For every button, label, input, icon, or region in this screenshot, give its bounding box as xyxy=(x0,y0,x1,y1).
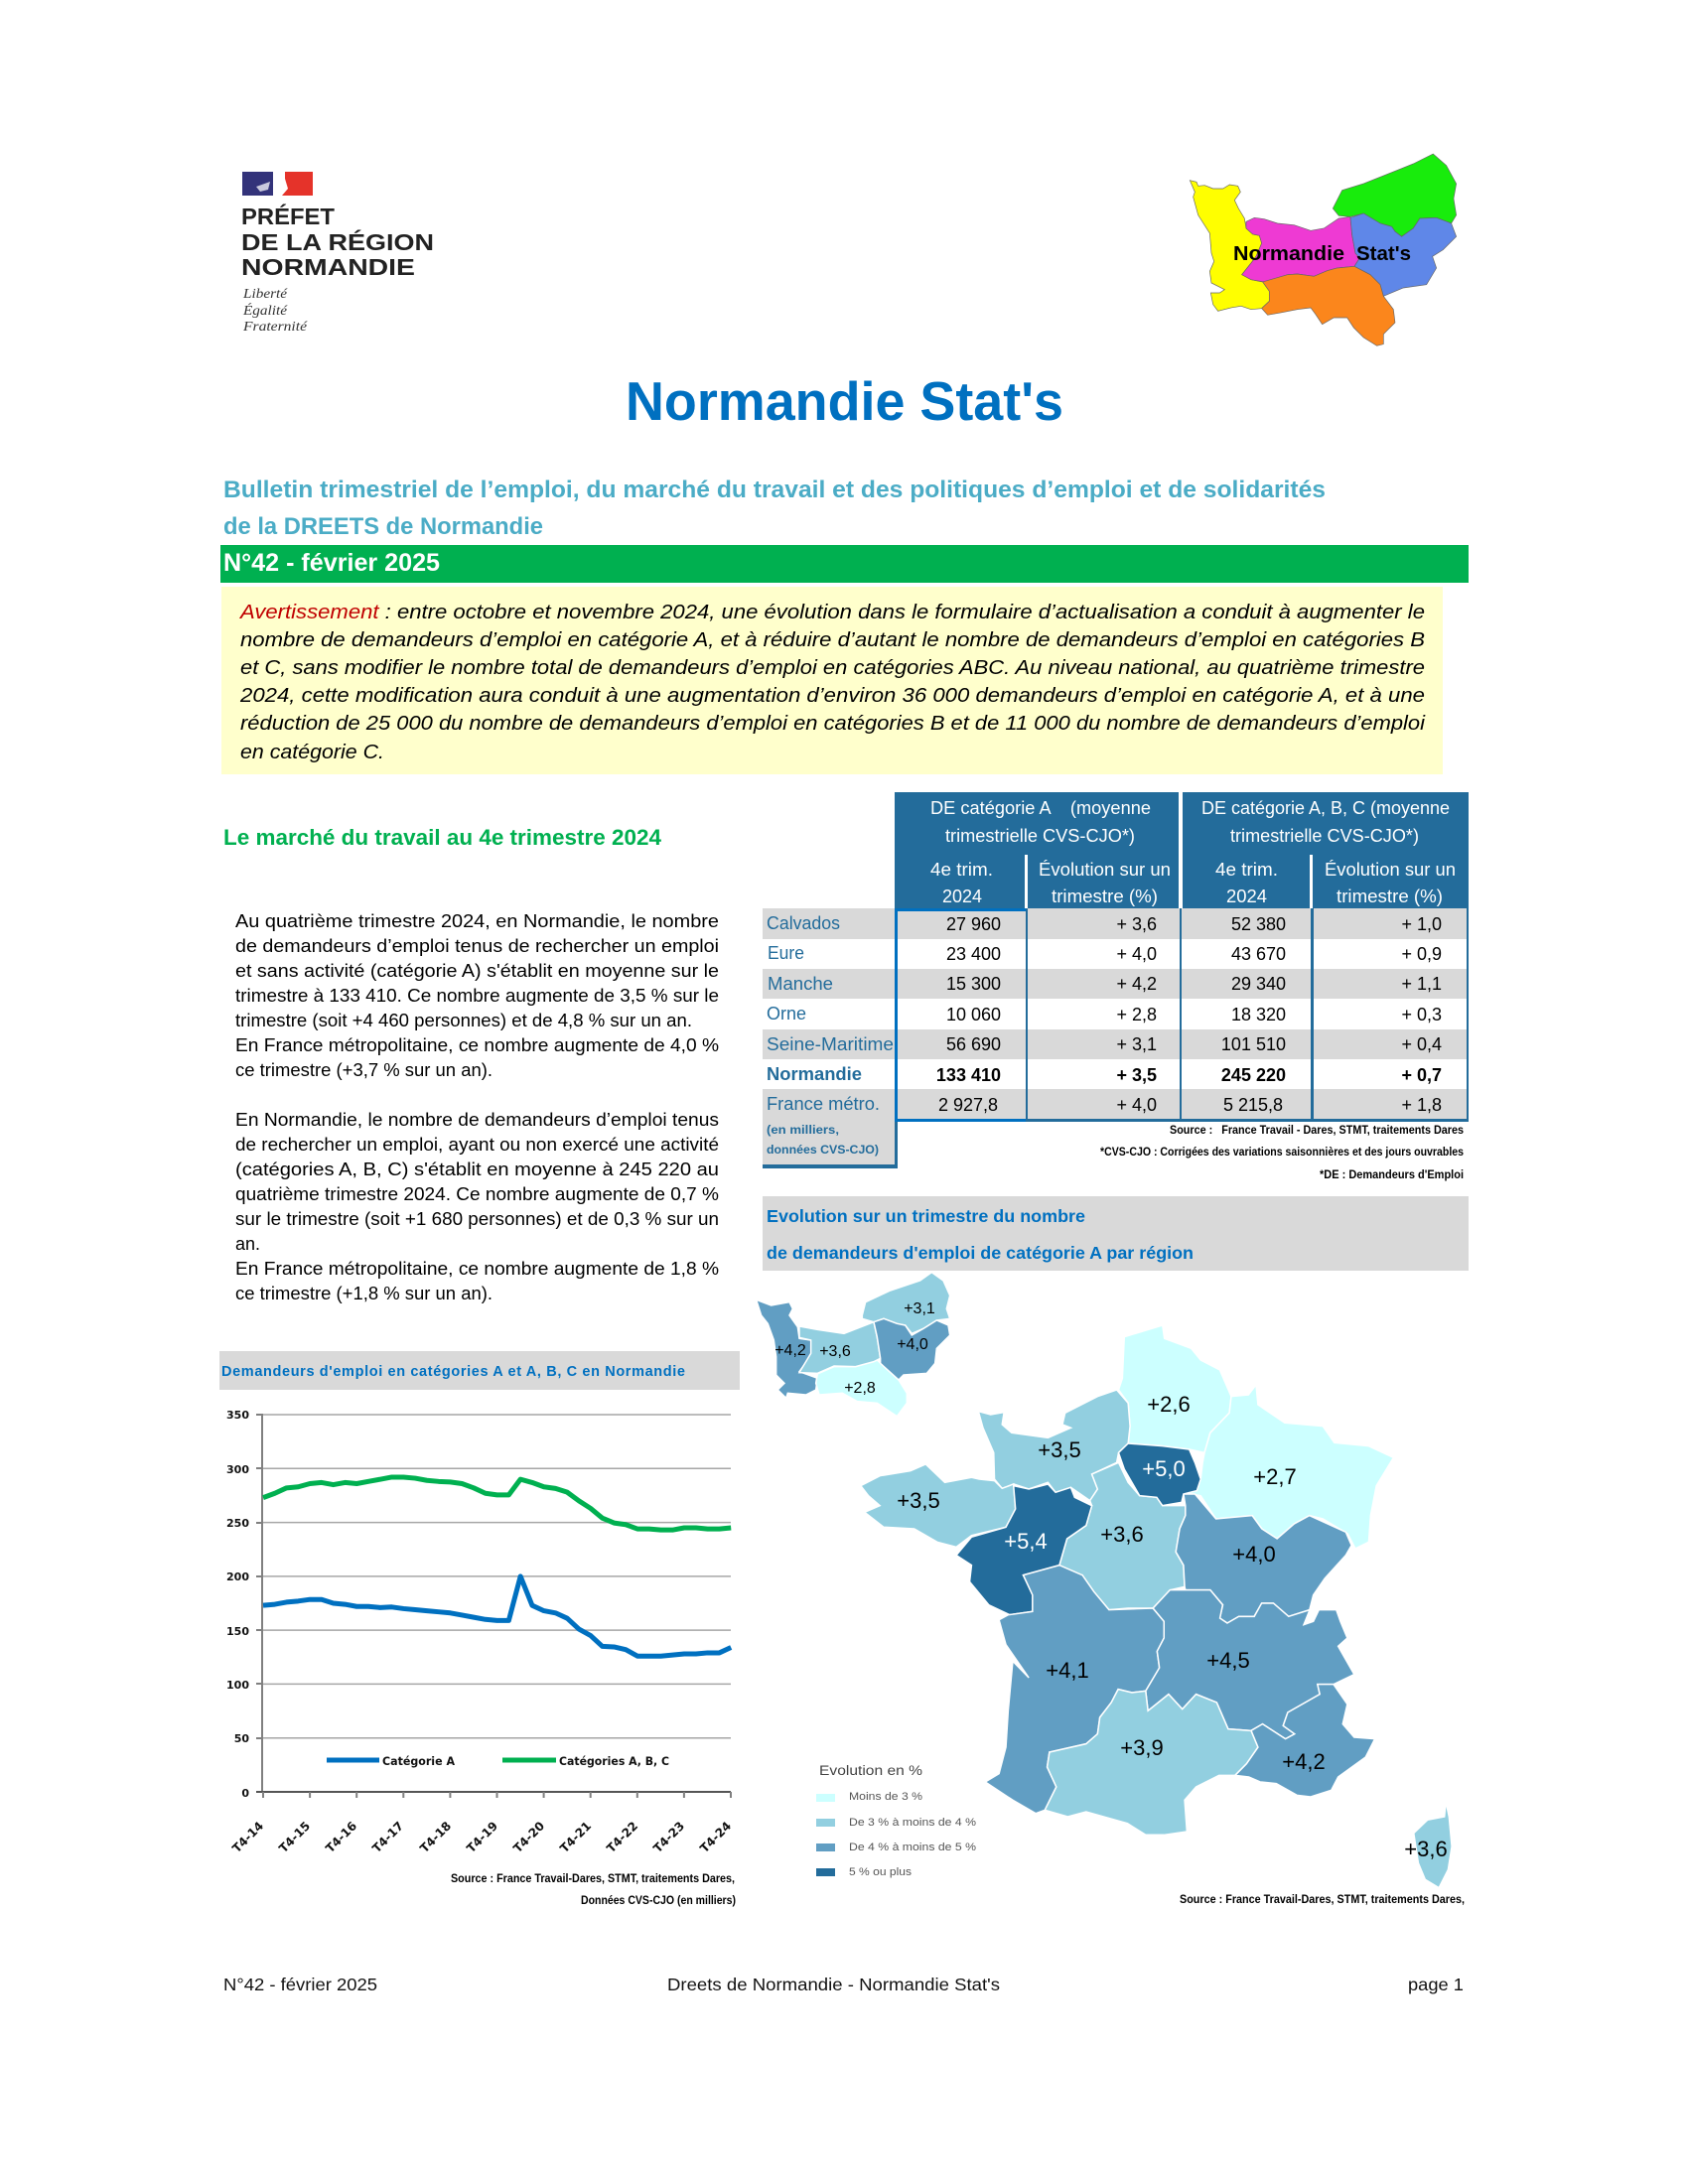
table header: Évolution sur un xyxy=(1325,860,1456,880)
logo map label: Stat's xyxy=(1356,243,1411,265)
series: categories A, B, C xyxy=(263,1477,731,1530)
table row labels: Normandie xyxy=(767,1064,862,1084)
table values: + 0,9 xyxy=(1401,944,1442,964)
map source: Source : France Travail-Dares, STMT, traitements Dares, xyxy=(1180,1894,1465,1906)
inset value labels xyxy=(774,1300,935,1397)
subtitle: de la DREETS de Normandie xyxy=(223,513,543,540)
map value labels: +4,1 xyxy=(1046,1658,1089,1683)
northern regions xyxy=(861,1325,1393,1623)
table values: 245 220 xyxy=(1221,1065,1286,1085)
x axis labels xyxy=(229,1819,734,1855)
table values: + 3,6 xyxy=(1116,914,1157,934)
table values: + 0,3 xyxy=(1401,1005,1442,1024)
section heading: labour market: Le marché du travail au 4e trimestre 2024 xyxy=(223,825,662,850)
map value labels: +4,5 xyxy=(1206,1648,1250,1673)
table header: DE catégorie A (moyenne xyxy=(930,798,1151,818)
table values: 29 340 xyxy=(1231,974,1286,994)
y axis labels: 350 xyxy=(226,1409,249,1422)
footer: N°42 - février 2025 xyxy=(223,1975,377,1994)
x axis labels: T4-20 xyxy=(510,1819,547,1855)
table values: 2 927,8 xyxy=(938,1095,998,1115)
table header: trimestrielle CVS-CJO*) xyxy=(945,826,1135,846)
inset value labels: +4,0 xyxy=(897,1336,928,1353)
map: Normandie inset xyxy=(757,1273,950,1417)
y axis labels: 200 xyxy=(226,1570,249,1583)
panel: warning callout: nombre de demandeurs d’emploi en catégorie A, et à réduire d’autant le nombre de demandeurs d’emploi en catégories B xyxy=(240,629,1425,651)
map value labels: +3,9 xyxy=(1120,1735,1164,1760)
inset value labels: +3,1 xyxy=(904,1300,935,1317)
y axis labels: 100 xyxy=(226,1679,249,1692)
map legend: Evolution en % xyxy=(819,1763,922,1778)
text block: labour market commentary: quatrième trimestre 2024. Ce nombre augmente de 0,7 % xyxy=(235,1183,719,1204)
table header: 4e trim. xyxy=(930,860,993,880)
map value labels: +3,6 xyxy=(1404,1837,1448,1861)
table row labels: données CVS-CJO) xyxy=(767,1143,879,1157)
x axis labels: T4-21 xyxy=(557,1819,594,1855)
x axis labels: T4-17 xyxy=(369,1819,406,1855)
text block: labour market commentary: sur le trimestre (soit +1 680 personnes) et de 0,3 % sur un xyxy=(235,1208,719,1229)
table source notes: Source : France Travail - Dares, STMT, traitements Dares xyxy=(1170,1125,1464,1137)
icon: Marianne flag xyxy=(242,172,313,196)
table header: DE catégorie A, B, C (moyenne xyxy=(1201,798,1450,818)
logo map label: Normandie xyxy=(1233,243,1344,265)
table values: + 3,1 xyxy=(1116,1034,1157,1054)
table values: 43 670 xyxy=(1231,944,1286,964)
table values: + 4,0 xyxy=(1116,1095,1157,1115)
logo text: institution name: PRÉFET xyxy=(241,203,336,229)
map: France regions xyxy=(861,1325,1452,1888)
series: category A xyxy=(263,1576,731,1656)
table source notes: *CVS-CJO : Corrigées des variations saisonnières et des jours ouvrables xyxy=(1100,1147,1464,1159)
table values: 18 320 xyxy=(1231,1005,1286,1024)
text block: labour market commentary xyxy=(235,910,719,1303)
issue banner xyxy=(220,545,1469,583)
panel: warning callout: en catégorie C. xyxy=(240,742,384,763)
map value labels xyxy=(897,1392,1448,1861)
inset value labels: +4,2 xyxy=(774,1342,806,1359)
y axis labels: 150 xyxy=(226,1625,249,1638)
chart heading: Demandeurs d'emploi en catégories A et A, B, C en Normandie xyxy=(221,1364,685,1380)
map value labels: +3,6 xyxy=(1100,1522,1144,1547)
table values: 23 400 xyxy=(946,944,1001,964)
logo text: motto: Fraternité xyxy=(242,320,308,335)
map value labels: +2,7 xyxy=(1253,1464,1297,1489)
panel: warning callout: 2024, cette modification aura conduit à une augmentation d’environ 36 000 demandeurs d’emploi en catégorie A, et à une xyxy=(239,685,1425,707)
chart legend xyxy=(327,1754,669,1768)
map heading xyxy=(763,1196,1469,1271)
map value labels: +4,2 xyxy=(1282,1749,1326,1774)
x axis labels: T4-16 xyxy=(323,1819,359,1855)
table row labels: Manche xyxy=(768,974,833,994)
table values: + 2,8 xyxy=(1116,1005,1157,1024)
table values: 52 380 xyxy=(1231,914,1286,934)
table values: + 4,0 xyxy=(1116,944,1157,964)
map legend: De 4 % à moins de 5 % xyxy=(849,1842,976,1853)
logo: Normandie Stat's coloured map xyxy=(1190,154,1457,345)
map legend: De 3 % à moins de 4 % xyxy=(849,1817,976,1829)
table values: 10 060 xyxy=(946,1005,1001,1024)
table values: + 0,7 xyxy=(1401,1065,1442,1085)
panel: warning callout: Avertissement : entre octobre et novembre 2024, une évolution dans le formulaire d’actualisation a conduit à augmenter le xyxy=(239,602,1425,623)
logo text: institution name: DE LA RÉGION xyxy=(241,228,434,255)
table values: + 4,2 xyxy=(1116,974,1157,994)
table values: 56 690 xyxy=(946,1034,1001,1054)
table header: Évolution sur un xyxy=(1039,860,1171,880)
table header: 2024 xyxy=(942,887,982,906)
table row labels: Calvados xyxy=(767,913,840,933)
text block: labour market commentary: En France métropolitaine, ce nombre augmente de 4,0 % xyxy=(235,1034,719,1055)
map value labels: +3,5 xyxy=(897,1488,940,1513)
x axis labels: T4-24 xyxy=(697,1819,734,1855)
text block: labour market commentary: Au quatrième trimestre 2024, en Normandie, le nombre xyxy=(235,910,719,931)
line chart: job seekers in Normandy xyxy=(226,1409,734,1855)
table row labels: France métro. xyxy=(767,1094,880,1114)
y axis labels: 50 xyxy=(234,1732,249,1745)
x axis labels: T4-15 xyxy=(276,1819,313,1855)
table values: 101 510 xyxy=(1221,1034,1286,1054)
text block: labour market commentary: de demandeurs d’emploi tenus de rechercher un emploi xyxy=(235,935,719,956)
table source notes xyxy=(1100,1125,1464,1181)
issue banner: N°42 - février 2025 xyxy=(223,549,440,577)
logo text: institution name: NORMANDIE xyxy=(241,254,415,280)
southern regions xyxy=(985,1566,1452,1888)
map legend: Moins de 3 % xyxy=(849,1791,922,1803)
text block: labour market commentary: trimestre à 133 410. Ce nombre augmente de 3,5 % sur le xyxy=(235,985,719,1006)
table source notes: *DE : Demandeurs d'Emploi xyxy=(1320,1169,1464,1181)
footer: page 1 xyxy=(1408,1975,1464,1994)
table values: + 1,0 xyxy=(1401,914,1442,934)
table values: 5 215,8 xyxy=(1223,1095,1283,1115)
map value labels: +2,6 xyxy=(1147,1392,1191,1417)
panel: warning callout xyxy=(221,587,1443,774)
logo: Préfet de la région Normandie xyxy=(241,172,434,335)
text block: labour market commentary: En Normandie, le nombre de demandeurs d’emploi tenus xyxy=(235,1109,719,1130)
table row labels: Seine-Maritime xyxy=(767,1034,894,1054)
text block: labour market commentary: (catégories A, B, C) s'établit en moyenne à 245 220 au xyxy=(235,1159,719,1179)
table values xyxy=(936,914,1442,1115)
panel: department table xyxy=(763,792,1469,1181)
logo text: institution name xyxy=(241,203,434,280)
table row labels: Eure xyxy=(768,943,804,963)
map heading: de demandeurs d'emploi de catégorie A par région xyxy=(767,1243,1194,1263)
logo map label xyxy=(1233,243,1411,265)
table header: 2024 xyxy=(1226,887,1267,906)
chart source xyxy=(451,1873,736,1907)
chart source: Source : France Travail-Dares, STMT, traitements Dares, xyxy=(451,1873,735,1885)
text block: labour market commentary: trimestre (soit +4 460 personnes) et de 4,8 % sur un an. xyxy=(235,1010,692,1030)
text block: labour market commentary: de rechercher un emploi, ayant ou non exercé une activité xyxy=(235,1134,719,1155)
table values: + 1,1 xyxy=(1401,974,1442,994)
chart heading xyxy=(219,1351,740,1390)
table values: + 0,4 xyxy=(1401,1034,1442,1054)
table header: trimestre (%) xyxy=(1336,887,1443,906)
y axis labels: 250 xyxy=(226,1517,249,1530)
logo text: motto: Liberté xyxy=(242,287,288,302)
y axis labels xyxy=(226,1409,249,1800)
logo text: motto xyxy=(242,287,308,335)
table header: trimestre (%) xyxy=(1052,887,1158,906)
text block: labour market commentary: ce trimestre (+1,8 % sur un an). xyxy=(235,1283,492,1303)
map value labels: +5,4 xyxy=(1004,1529,1048,1554)
title: Normandie Stat's xyxy=(626,370,1063,432)
chart legend: Catégorie A xyxy=(382,1754,455,1768)
x axis labels: T4-14 xyxy=(229,1819,266,1855)
x axis labels: T4-22 xyxy=(604,1819,640,1855)
table header: trimestrielle CVS-CJO*) xyxy=(1230,826,1419,846)
table header xyxy=(895,792,1469,908)
panel: warning callout: réduction de 25 000 du nombre de demandeurs d’emploi en catégories B et de 11 000 du nombre de demandeurs d’emploi xyxy=(240,713,1426,735)
text block: labour market commentary: En France métropolitaine, ce nombre augmente de 1,8 % xyxy=(235,1258,719,1279)
map legend xyxy=(816,1763,976,1878)
table values: 27 960 xyxy=(946,914,1001,934)
subtitle xyxy=(223,477,1326,540)
map value labels: +3,5 xyxy=(1038,1437,1081,1462)
text block: labour market commentary: ce trimestre (+3,7 % sur un an). xyxy=(235,1059,492,1080)
x axis labels: T4-18 xyxy=(417,1819,454,1855)
footer: Dreets de Normandie - Normandie Stat's xyxy=(667,1975,1000,1994)
table values: 15 300 xyxy=(946,974,1001,994)
chart legend: Catégories A, B, C xyxy=(559,1754,669,1768)
inset value labels: +2,8 xyxy=(844,1380,876,1397)
table values: 133 410 xyxy=(936,1065,1001,1085)
logo text: motto: Égalité xyxy=(242,302,288,319)
text block: labour market commentary: an. xyxy=(235,1233,260,1254)
table row labels: Orne xyxy=(767,1004,806,1024)
x axis labels: T4-19 xyxy=(464,1819,500,1855)
chart source: Données CVS-CJO (en milliers) xyxy=(581,1895,736,1907)
x axis labels: T4-23 xyxy=(650,1819,687,1855)
map value labels: +4,0 xyxy=(1232,1542,1276,1567)
table row labels xyxy=(767,913,894,1157)
footer xyxy=(223,1975,1464,1994)
table header: 4e trim. xyxy=(1215,860,1278,880)
table row labels: (en milliers, xyxy=(767,1123,839,1137)
map value labels: +5,0 xyxy=(1142,1456,1186,1481)
panel: warning callout: et C, sans modifier le nombre total de demandeurs d’emploi en catégories ABC. Au niveau national, au quatrième trimestre xyxy=(240,657,1425,679)
inset value labels: +3,6 xyxy=(819,1343,851,1360)
map legend: 5 % ou plus xyxy=(849,1866,913,1878)
table row stripes and borders xyxy=(763,908,1469,1168)
subtitle: Bulletin trimestriel de l’emploi, du marché du travail et des politiques d’emploi et de solidarités xyxy=(223,477,1326,503)
y axis labels: 300 xyxy=(226,1463,249,1476)
map heading: Evolution sur un trimestre du nombre xyxy=(767,1206,1085,1226)
text block: labour market commentary: et sans activité (catégorie A) s'établit en moyenne sur le xyxy=(235,960,719,981)
table values: + 1,8 xyxy=(1401,1095,1442,1115)
table values: + 3,5 xyxy=(1116,1065,1157,1085)
y axis labels: 0 xyxy=(241,1787,249,1800)
